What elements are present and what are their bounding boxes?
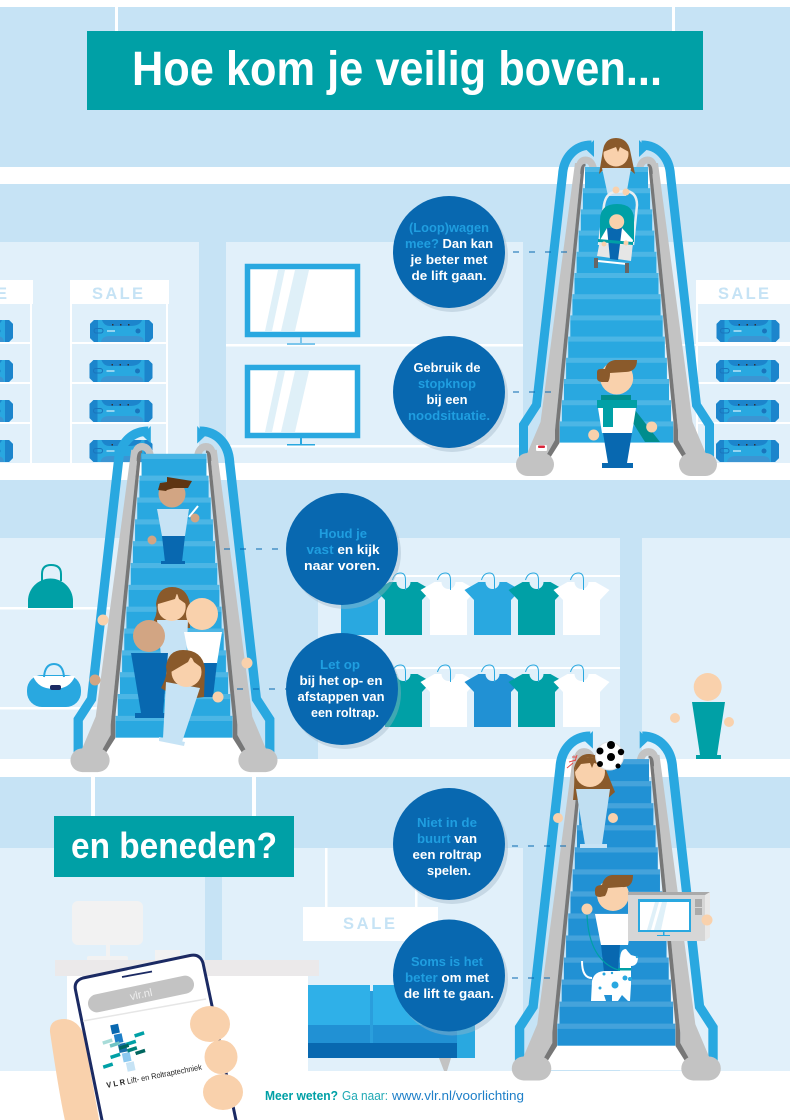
person in white shirt <box>184 598 222 697</box>
bubble: niet in de buurt: een roltrap <box>412 847 482 862</box>
fingers <box>190 1006 243 1110</box>
bubble: niet in de buurt: buurt van <box>417 831 477 846</box>
bag: teal <box>28 565 73 608</box>
stop button <box>536 445 547 451</box>
woman with stroller <box>594 138 637 273</box>
group of four people on escalator <box>90 587 252 746</box>
woman in front <box>159 650 224 746</box>
bubble: (loop)wagen <box>393 196 508 312</box>
bubble: stopknop <box>393 336 508 452</box>
bubble: let op <box>286 633 401 749</box>
bubble: niet in de buurt: spelen. <box>427 863 471 878</box>
bubble: stopknop: stopknop <box>418 376 476 391</box>
footer link: www.vlr.nl/voorlichting <box>391 1088 524 1103</box>
bubble: niet in de buurt: Niet in de <box>417 815 477 830</box>
bag: blue <box>27 664 81 707</box>
bubble: stopknop: Gebruik de <box>414 360 480 375</box>
man with tv and dog <box>582 875 712 1001</box>
bubble: stopknop: noodsituatie. <box>408 408 490 423</box>
right display with SALE sign: SALE <box>718 285 769 303</box>
phone: V L R Lift- en Roltraptechniek <box>106 1062 203 1090</box>
sale sign bottom <box>303 907 438 941</box>
woman at back <box>154 587 190 690</box>
phone: vlr.nl <box>129 987 154 1003</box>
escalator: middle left <box>70 426 278 772</box>
bubble: let op: afstappen van <box>298 689 385 704</box>
bubble: soms is het beter: de lift te gaan. <box>404 986 494 1001</box>
title banner: Hoe kom je veilig boven... <box>132 43 662 96</box>
bubble: (loop)wagen: de lift gaan. <box>412 268 486 283</box>
footer link: Ga naar: <box>342 1088 388 1103</box>
mannequin in teal <box>670 673 734 759</box>
bubble: houd je vast: Houd je <box>319 526 367 541</box>
stroller <box>594 191 637 273</box>
bubble: houd je vast <box>286 493 401 609</box>
t-shirts: upper rail <box>332 573 620 635</box>
person in dark blue <box>90 620 168 718</box>
bubble: soms is het beter: Soms is het <box>411 954 484 969</box>
bubble: (loop)wagen: (Loop)wagen <box>409 220 489 235</box>
centre-left display with SALE sign <box>70 280 169 463</box>
thumb <box>50 1019 100 1120</box>
bubble: let op: een roltrap. <box>311 705 379 720</box>
subtitle banner <box>54 816 294 877</box>
bubble: soms is het beter: beter om met <box>405 970 490 985</box>
bubble: stopknop: bij een <box>426 392 468 407</box>
logo <box>96 1022 151 1073</box>
bubble: (loop)wagen: je beter met <box>409 252 488 267</box>
footer link <box>265 1088 524 1103</box>
right display with SALE sign <box>696 280 790 463</box>
phone <box>75 955 237 1120</box>
hand holding phone <box>50 955 243 1120</box>
football <box>596 741 624 770</box>
dashed connector lines <box>224 252 568 978</box>
bubble: soms is het beter <box>393 920 508 1036</box>
subtitle banner: en beneden? <box>71 825 277 866</box>
bubble: let op: bij het op- en <box>300 673 383 688</box>
footer link: Meer weten? <box>265 1088 338 1103</box>
bubble: niet in de buurt <box>393 788 508 904</box>
escalator: top right <box>516 140 717 476</box>
man with phone on escalator <box>148 477 200 564</box>
t-shirts: lower rail <box>340 665 620 727</box>
woman with football <box>553 741 624 848</box>
centre-left display with SALE sign: SALE <box>92 285 143 303</box>
title banner <box>87 31 703 110</box>
bubble: houd je vast: vast en kijk <box>306 542 380 557</box>
sale sign bottom: SALE <box>343 915 395 933</box>
left display with SALE sign <box>0 280 33 463</box>
counter with monitor <box>55 901 319 1071</box>
dog <box>582 949 638 1001</box>
televisions on the wall <box>248 266 358 446</box>
bubble: (loop)wagen: mee? Dan kan <box>405 236 493 251</box>
bubble: let op: Let op <box>320 657 360 672</box>
bubble: houd je vast: naar voren. <box>304 558 380 573</box>
escalator: bottom right <box>512 731 721 1080</box>
man with scarf <box>588 360 660 468</box>
tv carried <box>628 892 710 941</box>
sofa <box>308 985 475 1071</box>
